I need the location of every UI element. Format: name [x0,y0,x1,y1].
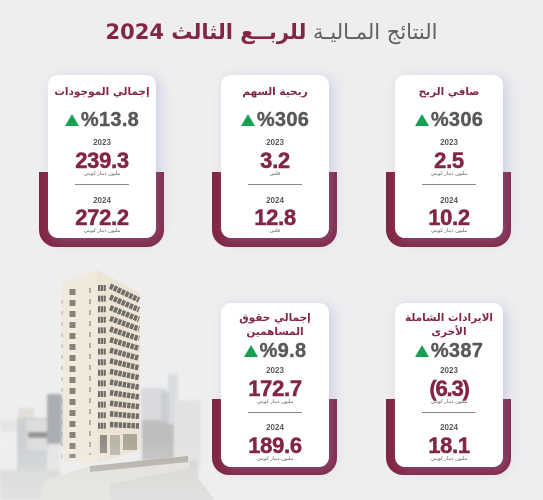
year 2024: 2024 [440,423,458,432]
title: النتائج المـاليـة للربــع الثالث 2024 [106,20,437,44]
card: other comprehensive income [386,302,512,475]
heading: total assets: إجمالي الموجودات [54,86,150,98]
value 2024: 12.8 [254,205,296,230]
year 2024: 2024 [440,196,458,205]
change: 9.8% up: %9.8 [260,340,306,362]
year 2023: 2023 [440,138,458,147]
change: 387% up: %387 [431,340,483,362]
white panel [221,303,329,467]
unit 2023: مليون دينار كويتي [84,170,120,176]
change: 13.8% up: %13.8 [81,109,139,131]
value 2024: 189.6 [248,433,302,458]
heading: total shareholders equity [239,312,311,338]
heading: earnings per share: ربحية السهم [242,86,308,98]
year 2024: 2024 [266,196,284,205]
value 2024: 18.1 [428,433,470,458]
heading: total shareholders equity: إجمالي حقوق [239,312,311,324]
year 2023: 2023 [93,138,111,147]
year 2023: 2023 [266,366,284,375]
year 2023: 2023 [266,138,284,147]
year 2024: 2024 [93,196,111,205]
heading: other comprehensive income [405,312,493,338]
heading: other comprehensive income: الأخرى [431,326,467,338]
heading: other comprehensive income: الايرادات الشاملة [405,312,493,324]
card: earnings per share [212,74,338,247]
value 2023: 172.7 [248,376,302,401]
value 2024: 272.2 [75,205,129,230]
heading: net profit: صافي الربح [419,86,479,98]
unit 2023: مليون دينار كويتي [431,398,467,404]
change: 306% up: %306 [257,109,309,131]
unit 2024: فلس [270,228,280,234]
white panel [395,75,503,238]
value 2023: 2.5 [434,148,464,173]
value 2023: 3.2 [260,148,290,173]
value 2023: 239.3 [75,148,129,173]
unit 2024: مليون دينار كويتي [431,228,467,234]
card: total shareholders equity [212,302,338,475]
year 2023: 2023 [440,366,458,375]
city skyline [0,374,201,500]
white panel [221,75,329,238]
card: net profit [386,74,512,247]
maroon backing panel [386,399,511,475]
white panel [48,75,156,238]
value 2023: (6.3) [429,376,469,401]
heading: total shareholders equity: المساهمين [246,326,304,338]
illustration: bank tower and city skyline [0,270,215,500]
unit 2023: فلس [270,170,280,176]
maroon backing panel [212,172,337,247]
value 2024: 10.2 [428,205,470,230]
maroon backing panel [39,172,164,247]
unit 2024: مليون دينار كويتي [84,228,120,234]
unit 2024: مليون دينار كويتي [431,456,467,462]
year 2024: 2024 [266,423,284,432]
tower [40,270,215,500]
unit 2023: مليون دينار كويتي [257,398,293,404]
card: total assets [39,74,164,247]
unit 2024: مليون دينار كويتي [257,456,293,462]
change: 306% up: %306 [431,109,483,131]
maroon backing panel [386,172,511,247]
unit 2023: مليون دينار كويتي [431,170,467,176]
maroon backing panel [212,399,337,475]
white panel [395,303,503,467]
